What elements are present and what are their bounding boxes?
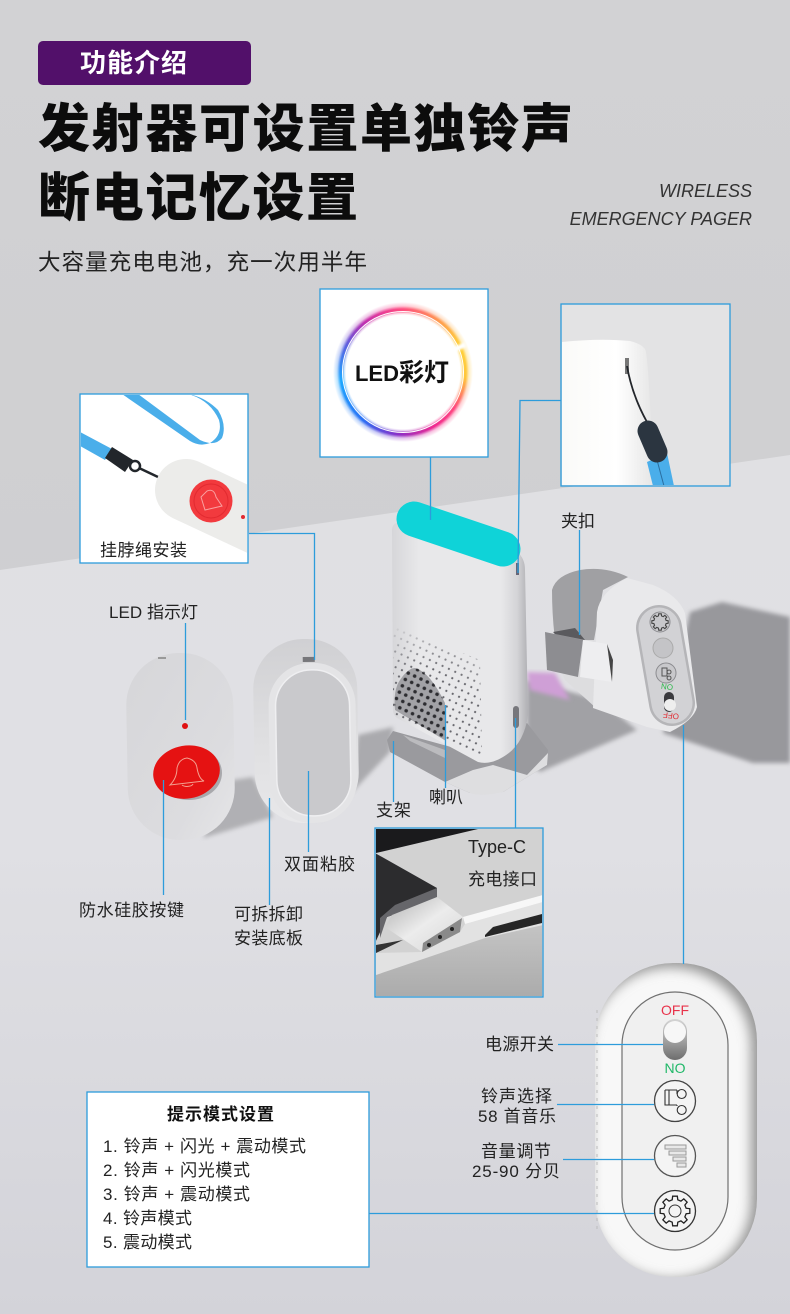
control panel xyxy=(659,628,672,703)
label: double-sided adhesive: 双面粘胶 xyxy=(284,855,355,874)
panel: alert mode settings: 1. 铃声 + 闪光 + 震动模式 xyxy=(103,1137,306,1156)
power switch: OFF xyxy=(661,1002,689,1018)
stand base xyxy=(387,723,548,793)
panel: alert mode settings: 2. 铃声 + 闪光模式 xyxy=(103,1161,250,1180)
label: volume adjustment xyxy=(472,1142,560,1181)
english label: wireless emergency pager: EMERGENCY PAGER xyxy=(570,209,752,229)
label: ringtone selection xyxy=(478,1087,556,1126)
speaker dot field xyxy=(393,625,482,755)
icon: LED ring gap xyxy=(452,342,466,353)
power switch: NO xyxy=(664,1060,686,1076)
front body xyxy=(593,578,697,732)
control panel outline xyxy=(622,992,728,1250)
callout lines xyxy=(164,400,684,1214)
panel: LED colour light xyxy=(320,289,488,457)
ringtone button xyxy=(654,1080,696,1122)
title: 发射器可设置单独铃声 xyxy=(38,101,573,159)
tag: 功能介绍 xyxy=(38,41,251,85)
power switch xyxy=(661,1002,689,1076)
background floor xyxy=(0,455,790,1314)
panel: alert mode settings: 3. 铃声 + 震动模式 xyxy=(103,1185,250,1204)
label: ringtone selection: 58 首音乐 xyxy=(478,1107,556,1126)
title: 断电记忆设置 xyxy=(38,170,358,228)
label: volume adjustment: 25-90 分贝 xyxy=(472,1162,560,1181)
speaker grille xyxy=(395,668,446,741)
panel: lanyard installation xyxy=(79,393,249,564)
product: mounting base plate xyxy=(252,638,360,824)
product: clip device: OFF xyxy=(662,710,680,721)
product: emergency button xyxy=(125,652,236,841)
side slot xyxy=(516,563,519,575)
product: clip device xyxy=(545,569,697,732)
label: LED colour light: LED彩灯 xyxy=(355,359,449,387)
panel: strap close-up xyxy=(561,304,730,486)
panel: Type-C port xyxy=(375,828,543,997)
clip band xyxy=(545,632,583,677)
panel: Type-C port: 充电接口 xyxy=(468,870,537,889)
volume button xyxy=(654,1136,696,1176)
label: removable base plate xyxy=(234,905,303,948)
label: volume adjustment: 音量调节 xyxy=(481,1142,551,1161)
cast shadows xyxy=(203,602,790,838)
cyan top light xyxy=(414,519,503,549)
label: LED indicator: LED 指示灯 xyxy=(109,603,198,622)
label: power switch: 电源开关 xyxy=(485,1035,554,1054)
product: wall-mounted receiver xyxy=(387,519,548,795)
tag: 功能介绍: 功能介绍 xyxy=(80,48,187,78)
english label: wireless emergency pager: WIRELESS xyxy=(659,181,752,201)
english label: wireless emergency pager xyxy=(570,181,752,229)
label: speaker: 喇叭 xyxy=(429,788,463,807)
label: removable base plate: 可拆拆卸 xyxy=(234,905,303,924)
label: removable base plate: 安装底板 xyxy=(234,929,303,948)
panel: alert mode settings xyxy=(87,1092,369,1267)
title xyxy=(38,101,573,228)
panel: lanyard installation: 挂脖绳安装 xyxy=(100,541,187,560)
label: ringtone selection: 铃声选择 xyxy=(481,1087,552,1106)
settings gear button xyxy=(654,1190,696,1232)
label: stand: 支架 xyxy=(376,801,411,820)
panel: Type-C port: Type-C xyxy=(468,837,526,857)
subtitle: 大容量充电电池，充一次用半年 xyxy=(38,250,367,275)
label: clip: 夹扣 xyxy=(561,512,595,531)
panel: alert mode settings: 4. 铃声模式 xyxy=(103,1209,192,1228)
icon: LED ring highlight xyxy=(342,311,464,433)
product: clip device: ON xyxy=(660,681,674,692)
receiver body xyxy=(392,522,528,763)
product: pager front view xyxy=(595,963,757,1276)
icon: LED rainbow ring glow xyxy=(330,300,474,444)
label: waterproof silicone button: 防水硅胶按键 xyxy=(79,901,184,920)
panel: alert mode settings: 提示模式设置 xyxy=(167,1105,274,1124)
panel: alert mode settings: 5. 震动模式 xyxy=(103,1233,192,1252)
back cover xyxy=(552,569,628,640)
